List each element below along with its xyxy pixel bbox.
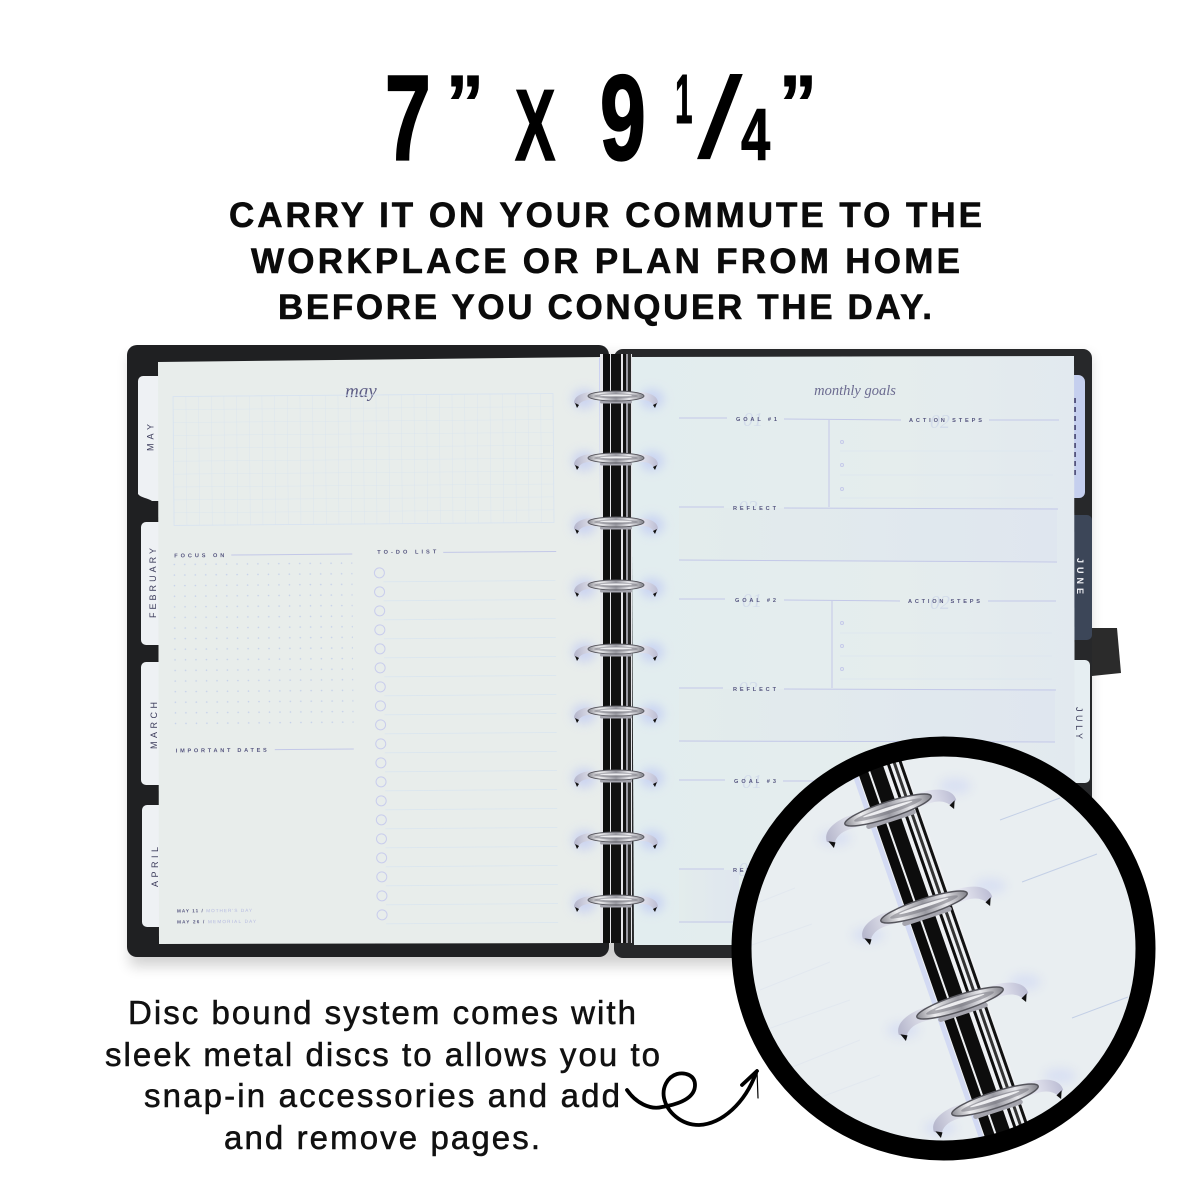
magnified discs [821, 781, 1066, 1140]
goal 1 section: ACTION STEPS [909, 418, 982, 424]
goal 3 section: GOAL #3 [734, 779, 776, 785]
goal 1 section: 02 [930, 411, 950, 433]
title: 1 [675, 60, 693, 138]
goal 2 section [679, 590, 1056, 742]
title: ” [446, 58, 484, 148]
goal 2 section: ACTION STEPS [908, 599, 980, 605]
title: 7 [385, 50, 431, 185]
date notes: MAY 11 / MOTHER'S DAY [177, 908, 252, 913]
date notes [177, 908, 256, 924]
magnified detail circle [732, 736, 1156, 1160]
goal 1 section [679, 409, 1059, 562]
right cover [614, 349, 1092, 958]
right tabs: JULY [1074, 707, 1084, 739]
binding spine [600, 354, 632, 943]
disc glow [572, 389, 664, 913]
metal discs [574, 391, 658, 912]
left page [158, 357, 607, 944]
page lines [1000, 798, 1128, 1018]
goal 1 section: 03 [738, 497, 758, 519]
planner [127, 345, 1121, 966]
left tabs: MARCH [149, 702, 159, 749]
title [385, 50, 817, 185]
page heading: monthly goals [814, 383, 896, 399]
goal 1 section: GOAL #1 [736, 417, 777, 423]
title: 4 [741, 95, 771, 176]
goal 2 section: 02 [930, 592, 950, 614]
disc description: Disc bound system comes with [128, 994, 636, 1031]
goal 3 section: REFLECT [733, 868, 777, 874]
to-do list [374, 548, 559, 924]
month heading: may [345, 381, 377, 402]
title: ” [779, 58, 817, 148]
subtitle [229, 196, 982, 327]
left tabs: MAY [146, 424, 156, 451]
title: X [515, 69, 555, 182]
title: 9 [600, 50, 646, 185]
subtitle: BEFORE YOU CONQUER THE DAY. [278, 288, 932, 327]
right tabs [1070, 375, 1092, 783]
subtitle: WORKPLACE OR PLAN FROM HOME [251, 242, 960, 281]
goal 3 section: 01 [742, 771, 762, 793]
left tabs: FEBRUARY [148, 548, 158, 618]
goal 3 section: 03 [738, 859, 758, 881]
goal 2 section: GOAL #2 [735, 598, 776, 604]
right page [631, 356, 1075, 945]
title: / [697, 54, 743, 183]
right tabs: JUNE [1075, 558, 1085, 594]
goal 3 section [679, 771, 820, 923]
important dates: IMPORTANT DATES [176, 748, 267, 754]
curly arrow [627, 1071, 758, 1125]
elastic bookmark [1092, 628, 1121, 676]
disc description: snap-in accessories and add [144, 1077, 620, 1114]
goal 2 section: REFLECT [733, 687, 777, 693]
disc description [105, 994, 660, 1156]
grid [173, 393, 554, 525]
magnified disc glow [819, 778, 1076, 1136]
left tabs: APRIL [150, 847, 160, 887]
left cover [127, 345, 609, 957]
to-do list: TO-DO LIST [377, 549, 437, 556]
goal 1 section: REFLECT [733, 506, 777, 512]
goal 2 section: 01 [742, 590, 762, 612]
disc description: sleek metal discs to allows you to [105, 1036, 660, 1073]
magnified spine [854, 761, 1027, 1137]
focus on [172, 552, 354, 726]
focus on: FOCUS ON [174, 553, 224, 559]
disc description: and remove pages. [224, 1119, 540, 1156]
goal 1 section: 01 [743, 409, 763, 431]
left tabs [138, 376, 160, 927]
goal 2 section: 03 [738, 678, 758, 700]
subtitle: CARRY IT ON YOUR COMMUTE TO THE [229, 196, 982, 235]
date notes: MAY 26 / MEMORIAL DAY [177, 919, 256, 924]
